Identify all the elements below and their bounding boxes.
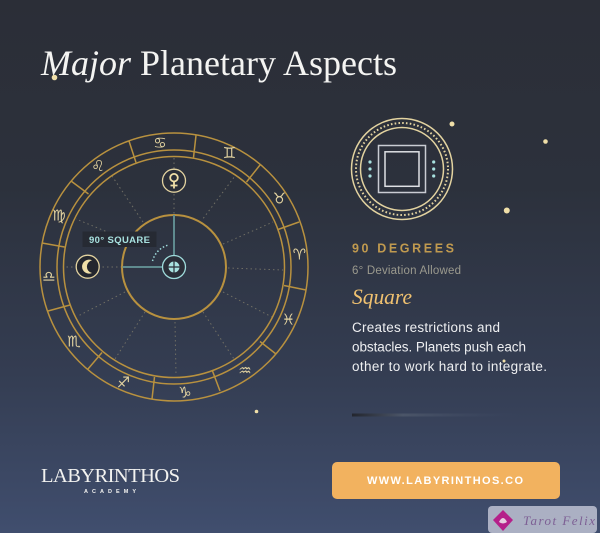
- planet: venus: [162, 169, 186, 192]
- zodiac signs: ♎︎: [42, 268, 56, 286]
- icon: square aspect badge: [352, 118, 452, 220]
- stars: [52, 75, 548, 413]
- subheading: deviation: 6° Deviation Allowed: [352, 265, 461, 277]
- label: 90 degree square: 90° SQUARE: [89, 235, 150, 246]
- planet: earth: [162, 256, 186, 278]
- logo: Labyrinthos Academy: ACADEMY: [84, 489, 136, 495]
- aspect name: Square: [352, 284, 412, 309]
- zodiac wheel chart: [40, 133, 308, 402]
- zodiac signs: ♉︎: [273, 190, 286, 208]
- dotted spokes: [66, 158, 283, 375]
- zodiac signs: ♏︎: [67, 332, 81, 350]
- zodiac signs: ♈︎: [293, 246, 306, 264]
- rings: [40, 133, 308, 401]
- description text: Creates restrictions and: [352, 320, 500, 335]
- watermark: Tarot Felix: [488, 506, 597, 533]
- angle arc: [152, 245, 168, 261]
- title: Major Planetary Aspects: [40, 43, 397, 83]
- description text: [352, 320, 547, 374]
- zodiac signs: ♑︎: [178, 384, 192, 402]
- planet: moon: [76, 255, 99, 278]
- aspect lines: [122, 215, 174, 267]
- zodiac dividers: [42, 136, 306, 399]
- zodiac signs: ♋︎: [153, 134, 167, 152]
- watermark: Tarot Felix: Tarot Felix: [523, 513, 595, 528]
- label: 90 degree square: [82, 232, 156, 247]
- divider bar: [352, 414, 522, 416]
- zodiac signs: ♒︎: [238, 362, 252, 380]
- zodiac signs: ♌︎: [91, 157, 105, 175]
- description text: other to work hard to integrate.: [352, 359, 547, 374]
- zodiac signs: ♍︎: [52, 206, 66, 224]
- button: website: [332, 462, 560, 499]
- logo: Labyrinthos Academy: LABYRINTHOS: [41, 465, 180, 487]
- zodiac signs: ♐︎: [117, 374, 130, 392]
- heading: 90 degrees: 90 DEGREES: [352, 242, 454, 256]
- zodiac signs: [42, 134, 306, 402]
- button: website: WWW.LABYRINTHOS.CO: [367, 475, 523, 487]
- zodiac signs: ♊︎: [223, 144, 236, 162]
- zodiac signs: ♓︎: [282, 310, 295, 328]
- description text: obstacles. Planets push each: [352, 340, 526, 354]
